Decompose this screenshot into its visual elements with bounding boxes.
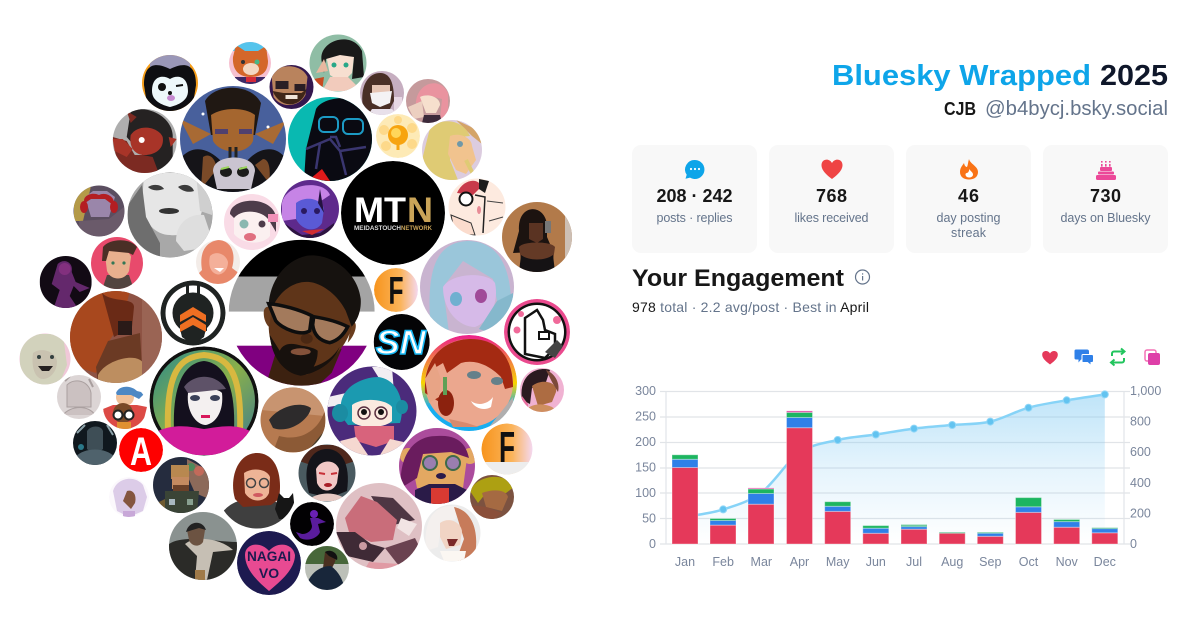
avatar: SN neon logo: [374, 314, 430, 370]
stat card: posts and replies: [632, 145, 757, 253]
stat card: days on Bluesky: [1043, 145, 1168, 253]
icon: chat bubble: [685, 160, 704, 179]
avatar: overwatch-style logo: [160, 280, 226, 346]
avatar: purple-blue character: [281, 180, 339, 238]
avatar: red circle with letter A: [119, 428, 163, 474]
bar: December: [1092, 528, 1118, 544]
engagement chart: [635, 384, 1161, 569]
right axis labels: 400: [1130, 476, 1151, 490]
avatar: black and white fox: [142, 55, 198, 111]
right axis labels: 800: [1130, 414, 1151, 428]
avatar: honey drop icon: [376, 114, 420, 158]
month labels: Apr: [790, 555, 809, 569]
avatar: teal-haired girl with glasses: [328, 366, 416, 456]
left axis labels: [635, 384, 656, 551]
title: 2025: [1100, 60, 1168, 92]
avatar: navy logo with pink heart lettering: [237, 531, 301, 595]
stat card: likes received: 768: [816, 186, 847, 206]
right axis labels: 0: [1130, 537, 1137, 551]
heading: your engagement: Your Engagement: [632, 265, 844, 292]
avatar: MeidasTouch Network logo: [341, 161, 445, 265]
avatar: orange F logo: F: [388, 270, 404, 313]
avatar: pale woman with dark hair: [298, 444, 356, 502]
bar: May: [825, 502, 851, 544]
avatar: man on pink background: [91, 237, 143, 289]
cumulative area: [685, 394, 1105, 544]
icon: repost arrows: [1111, 348, 1124, 366]
cumulative line with points: [685, 391, 1108, 517]
avatar: dark purple figure: [40, 256, 92, 308]
avatar: pink-haired girl: [406, 79, 450, 123]
month labels: Oct: [1019, 555, 1039, 569]
stat card: likes received: [769, 145, 894, 253]
left axis labels: 200: [635, 435, 656, 449]
stat card: day posting streak: day posting: [936, 211, 1001, 225]
avatar: second orange F logo: [482, 423, 532, 475]
avatar: dark helmet with blue glasses on teal: [288, 97, 372, 181]
chart legend icons: [1042, 348, 1160, 366]
avatar bubble cluster: [20, 34, 572, 595]
avatar: brown-skinned girl with pink hair streak: [520, 368, 564, 412]
month labels: Jul: [906, 555, 922, 569]
stat card: posts and replies: 208 · 242: [656, 186, 732, 206]
stat card: day posting streak: streak: [951, 226, 987, 240]
month labels: Nov: [1056, 555, 1079, 569]
avatar: woman selfie on wood background: [502, 202, 572, 272]
avatar: navy logo with pink heart lettering: NAGAI: [247, 548, 291, 564]
bar: February: [710, 518, 736, 544]
avatar: main profile, bearded man with glasses on asexual flag: [229, 240, 375, 386]
avatar: anime girl on pink: [224, 194, 280, 250]
bar: January: [672, 455, 698, 544]
avatar: lilac hair figure: [113, 478, 147, 517]
avatar: yellow-haired figure: [470, 475, 514, 519]
right axis labels: 1,000: [1130, 384, 1161, 398]
left axis labels: 0: [649, 537, 656, 551]
month labels: Mar: [751, 555, 772, 569]
user name and handle: @b4bycj.bsky.social: [985, 98, 1168, 120]
user name and handle: CJB: [944, 99, 976, 119]
avatar: white and auburn hair pair: [424, 504, 480, 562]
avatar: man in dark coat: [169, 512, 237, 580]
icon: flame: [960, 159, 978, 180]
icon: info: [856, 270, 870, 284]
month labels: Aug: [941, 555, 963, 569]
avatar: second orange F logo: F: [499, 423, 515, 472]
avatar: purple mermaid on black: [290, 502, 334, 546]
title: Bluesky Wrapped: [832, 60, 1091, 92]
bar: June: [863, 526, 889, 544]
avatar: purple wolf: [74, 186, 124, 236]
bar: November: [1054, 520, 1080, 544]
avatar: rainbow-haired girl portrait: [150, 346, 258, 456]
avatar: pink beast floral sketch: [336, 483, 422, 569]
avatar: person with face mask: [360, 71, 404, 115]
bar: October: [1016, 498, 1042, 544]
month labels: [675, 555, 1116, 569]
month labels: Dec: [1094, 555, 1116, 569]
bar: September: [977, 532, 1003, 544]
right axis labels: [1130, 384, 1161, 551]
left axis labels: 150: [635, 460, 656, 474]
avatar: green-hair anime girl: [310, 34, 366, 92]
avatar: red devil girl: [113, 109, 177, 173]
avatar: MeidasTouch Network logo: N: [407, 191, 433, 230]
avatar: kissing sketch: [448, 178, 506, 236]
icon: reply bubbles: [1074, 350, 1094, 366]
avatar: blonde elf: [422, 120, 482, 180]
avatar: man in dark shirt outdoors: [305, 546, 349, 590]
avatar: black and white portrait of woman: [128, 172, 212, 258]
stacked bars: [672, 411, 1118, 544]
icon: like heart: [1042, 351, 1058, 364]
avatar: dark armored figure: [73, 421, 117, 465]
icon: heart: [822, 160, 842, 179]
month labels: Sep: [979, 555, 1001, 569]
avatar: lips closeup: [260, 388, 326, 452]
avatar: brown furry costume: [70, 291, 162, 383]
stat card: likes received: likes received: [794, 211, 869, 225]
avatar: MeidasTouch Network logo: MEIDASTOUCH: [354, 225, 401, 232]
avatar: SN neon logo: SN: [376, 324, 427, 362]
month labels: Jun: [866, 555, 886, 569]
avatar: lilac elf with blue hair: [420, 240, 514, 334]
gridlines and axes: [660, 391, 1130, 544]
avatar: white character with hearts and pink ring: [504, 299, 570, 365]
bar: August: [939, 532, 965, 544]
avatar: pale-haired woman: [20, 334, 70, 385]
bar: July: [901, 525, 927, 544]
avatar: red-haired girl with pride ring: [421, 335, 517, 431]
avatar: peach-haired girl: [196, 240, 240, 284]
icon: quote squares: [1145, 350, 1160, 365]
left axis labels: 250: [635, 410, 656, 424]
avatar: orange F logo: [374, 268, 418, 313]
right axis labels: 600: [1130, 445, 1151, 459]
avatar: navy logo with pink heart lettering: VO: [259, 565, 279, 581]
right axis labels: 200: [1130, 506, 1151, 520]
stat card: day posting streak: [906, 145, 1031, 253]
avatar: brown-haired woman with glasses and cat: [224, 453, 294, 528]
avatar: chibi pair on red shape: [103, 385, 147, 429]
left axis labels: 100: [635, 486, 656, 500]
stat card: days on Bluesky: days on Bluesky: [1060, 211, 1151, 225]
avatar: grey sketch: [57, 375, 101, 419]
avatar: MeidasTouch Network logo: NETWORK: [401, 225, 432, 232]
avatar: red circle with letter A: A: [130, 430, 152, 474]
stat card: days on Bluesky: 730: [1090, 186, 1121, 206]
avatar: pixel-art bearded man: [153, 457, 209, 513]
stat card: posts and replies: posts · replies: [656, 211, 732, 225]
bar: April: [786, 411, 812, 544]
avatar: orange cat: [229, 42, 271, 84]
month labels: Jan: [675, 555, 695, 569]
avatar: purple-haired bear with glasses: [399, 428, 478, 504]
avatar: MeidasTouch Network logo: MT: [354, 191, 406, 230]
avatar: horned character holding skull: [180, 86, 286, 192]
icon: cake: [1096, 161, 1116, 180]
stat card: day posting streak: 46: [958, 186, 979, 206]
month labels: Feb: [712, 555, 734, 569]
bar: March: [748, 488, 774, 544]
left axis labels: 50: [642, 512, 656, 526]
left axis labels: 300: [635, 384, 656, 398]
avatar: bald man with glasses: [270, 65, 314, 109]
month labels: May: [826, 555, 850, 569]
engagement summary: 978 total · 2.2 avg/post · Best in April: [632, 299, 869, 315]
